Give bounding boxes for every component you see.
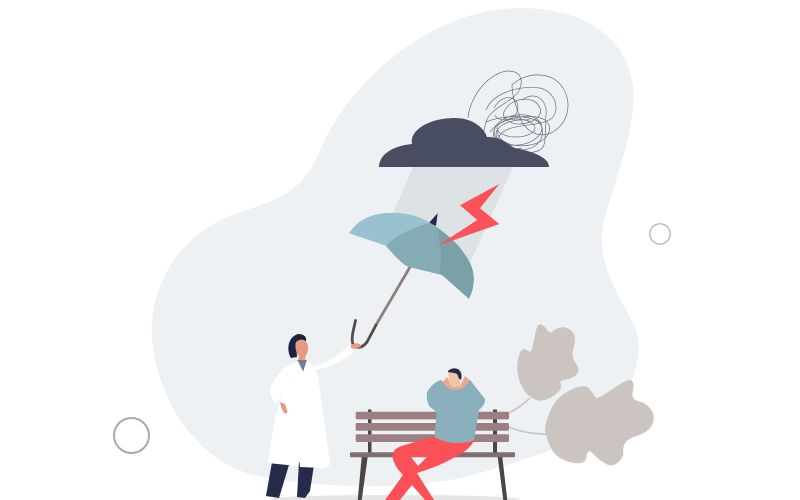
circle: right decoration: [650, 224, 670, 244]
doctor face and neck: [295, 340, 308, 362]
cloud: [379, 118, 549, 167]
lightning bolt: [438, 184, 499, 246]
ground shadow: [270, 495, 520, 500]
doctor hand on umbrella: [351, 343, 361, 349]
light beam under cloud: [393, 167, 513, 263]
circle: left decoration: [114, 418, 149, 453]
doctor hand on hip: [280, 402, 288, 413]
umbrella: [349, 213, 474, 347]
man trousers: [385, 436, 475, 500]
bench slats: [356, 412, 509, 442]
bench legs: [358, 457, 507, 500]
small leaf: [518, 325, 578, 400]
doctor coat: [268, 344, 354, 468]
man sweater: [427, 380, 485, 443]
doctor shirt: [297, 360, 307, 372]
bench back posts: [368, 410, 497, 453]
man face: [448, 372, 460, 387]
seated man: [385, 368, 485, 500]
background blob: [152, 8, 639, 486]
scribble of tangled thoughts: [468, 71, 568, 160]
umbrella shaft and handle: [352, 267, 410, 347]
doctor legs: [266, 462, 314, 498]
leaf stems: [509, 398, 548, 434]
doctor: [266, 334, 361, 498]
umbrella middle panel: [386, 223, 474, 299]
bench seat: [350, 452, 515, 457]
umbrella canopy: [349, 213, 474, 299]
umbrella right panel: [436, 228, 474, 299]
umbrella tip: [429, 213, 438, 226]
doctor hair: [288, 334, 306, 358]
bench: [350, 410, 515, 500]
man neck and hands: [441, 376, 472, 392]
man hair: [448, 368, 462, 380]
large leaf: [546, 381, 653, 465]
